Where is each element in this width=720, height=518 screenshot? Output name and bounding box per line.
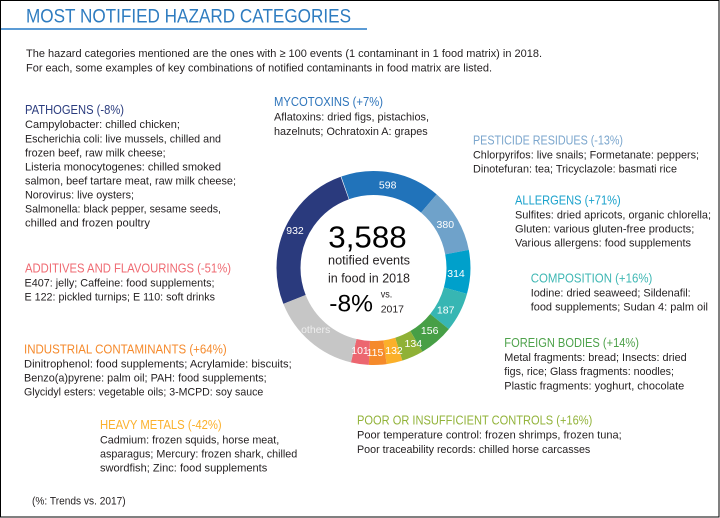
intro text: The hazard categories mentioned are the ones with ≥ 100 events (1 contaminant in 1 food matrix) in 2018. — [26, 48, 542, 60]
text: mycotoxins examples: hazelnuts; Ochratoxin A: grapes — [274, 126, 428, 138]
panel: additives and flavourings — [24, 261, 231, 304]
text: controls examples — [357, 430, 622, 456]
text: industrial examples: Benzo(a)pyrene: palm oil; PAH: food supplements; — [24, 373, 267, 385]
panel: pathogens — [25, 103, 236, 230]
text: composition examples: food supplements; Sudan 4: palm oil — [531, 302, 708, 314]
segment value labels: 101 — [351, 345, 369, 357]
text: pathogens examples: Campylobacter: chilled chicken; — [25, 119, 180, 131]
donut centre text: 2017 — [381, 303, 404, 315]
text: allergens examples — [515, 210, 711, 250]
segment value labels: 187 — [437, 304, 455, 316]
donut centre text: vs. — [381, 288, 392, 300]
text: pathogens examples: chilled and frozen poultry — [25, 218, 150, 230]
segment value labels: 115 — [367, 347, 384, 359]
text: pathogens examples: Norovirus: live oysters; — [25, 190, 134, 202]
text: additives examples: E 122: pickled turnips; E 110: soft drinks — [24, 292, 215, 304]
text: allergens examples: Sulfites: dried apricots, organic chlorella; — [515, 210, 711, 222]
panel: poor or insufficient controls — [357, 413, 622, 456]
donut centre text: notified events — [328, 253, 410, 267]
text: pathogens examples: Listeria monocytogenes: chilled smoked — [25, 161, 221, 173]
heading: heavy metals: HEAVY METALS (-42%) — [100, 418, 222, 432]
text: mycotoxins examples — [274, 112, 429, 138]
donut chart — [265, 160, 482, 376]
donut centre text: 3,588 — [328, 219, 407, 254]
text: controls examples: Poor temperature control: frozen shrimps, frozen tuna; — [357, 430, 622, 442]
heading: additives and flavourings: ADDITIVES AND FLAVOURINGS (-51%) — [25, 261, 231, 275]
heading: pesticide residues: PESTICIDE RESIDUES (-13%) — [473, 133, 623, 147]
text: mycotoxins examples: Aflatoxins: dried figs, pistachios, — [274, 112, 429, 124]
text: pesticide examples — [473, 149, 699, 176]
heading: foreign bodies: FOREIGN BODIES (+14%) — [504, 336, 639, 350]
text: pathogens examples: frozen beef, raw milk cheese; — [25, 147, 166, 159]
heading: mycotoxins: MYCOTOXINS (+7%) — [274, 95, 383, 109]
text: foreign bodies examples: Plastic fragments: yoghurt, chocolate — [504, 380, 684, 392]
heading: allergens: ALLERGENS (+71%) — [515, 194, 621, 208]
donut centre text: -8% — [329, 291, 373, 318]
panel: foreign bodies — [504, 336, 687, 392]
intro text — [26, 48, 542, 74]
donut centre text: in food in 2018 — [328, 271, 410, 285]
panel: mycotoxins — [274, 95, 429, 138]
heading: composition: COMPOSITION (+16%) — [531, 271, 652, 285]
text: additives examples — [24, 278, 215, 304]
text: pathogens examples: salmon, beef tartare meat, raw milk cheese; — [25, 176, 236, 188]
panel: industrial contaminants — [24, 342, 292, 399]
panel: heavy metals — [100, 418, 297, 474]
text: allergens examples: Various allergens: food supplements — [515, 238, 691, 250]
segment value labels: 156 — [421, 325, 439, 337]
segment value labels — [286, 180, 465, 359]
donut centre text — [328, 219, 410, 318]
text: pesticide examples: Chlorpyrifos: live snails; Formetanate: peppers; — [473, 149, 699, 161]
footnote: (%: Trends vs. 2017) — [32, 495, 126, 507]
text: pathogens examples — [25, 119, 236, 230]
segment value labels: 380 — [437, 219, 454, 231]
text: heavy metals examples: asparagus; Mercury: frozen shark, chilled — [100, 448, 297, 460]
text: heavy metals examples — [100, 434, 297, 474]
text: industrial examples: Glycidyl esters: vegetable oils; 3-MCPD: soy sauce — [24, 387, 263, 399]
segment value labels: 132 — [385, 345, 403, 357]
text: controls examples: Poor traceability records: chilled horse carcasses — [357, 444, 591, 456]
text: pathogens examples: Salmonella: black pepper, sesame seeds, — [25, 204, 221, 216]
title: MOST NOTIFIED HAZARD CATEGORIES — [26, 5, 351, 27]
text: additives examples: E407: jelly; Caffeine: food supplements; — [24, 278, 214, 290]
intro text: For each, some examples of key combinations of notified contaminants in food matrix are listed. — [26, 62, 492, 74]
text: composition examples: Iodine: dried seaweed; Sildenafil: — [531, 288, 691, 300]
donut segments — [265, 160, 482, 376]
segment value labels: 314 — [447, 268, 465, 280]
text: composition examples — [531, 288, 708, 314]
text: heavy metals examples: Cadmium: frozen squids, horse meat, — [100, 434, 279, 446]
text: pathogens examples: Escherichia coli: live mussels, chilled and — [25, 133, 221, 145]
segment value labels: 932 — [286, 225, 304, 237]
text: heavy metals examples: swordfish; Zinc: food supplements — [100, 462, 268, 474]
segment value labels: 598 — [379, 180, 397, 192]
panel: pesticide residues — [473, 133, 699, 176]
text: pesticide examples: Dinotefuran: tea; Tricyclazole: basmati rice — [473, 164, 677, 176]
panel: composition — [531, 271, 708, 314]
segment value labels: 134 — [405, 338, 422, 350]
segment value labels: others — [301, 324, 330, 336]
text: foreign bodies examples — [504, 352, 687, 392]
text: foreign bodies examples: figs, rice; Glass fragments: noodles; — [504, 366, 674, 378]
text: industrial examples: Dinitrophenol: food supplements; Acrylamide: biscuits; — [24, 359, 292, 371]
text: foreign bodies examples: Metal fragments: bread; Insects: dried — [504, 352, 687, 364]
text: allergens examples: Gluten: various gluten-free products; — [515, 224, 694, 236]
text: industrial examples — [24, 359, 292, 399]
panel: allergens — [515, 194, 711, 250]
heading: industrial contaminants: INDUSTRIAL CONTAMINANTS (+64%) — [24, 342, 227, 356]
heading: poor or insufficient controls: POOR OR INSUFFICIENT CONTROLS (+16%) — [357, 413, 592, 427]
heading: pathogens: PATHOGENS (-8%) — [25, 103, 124, 117]
